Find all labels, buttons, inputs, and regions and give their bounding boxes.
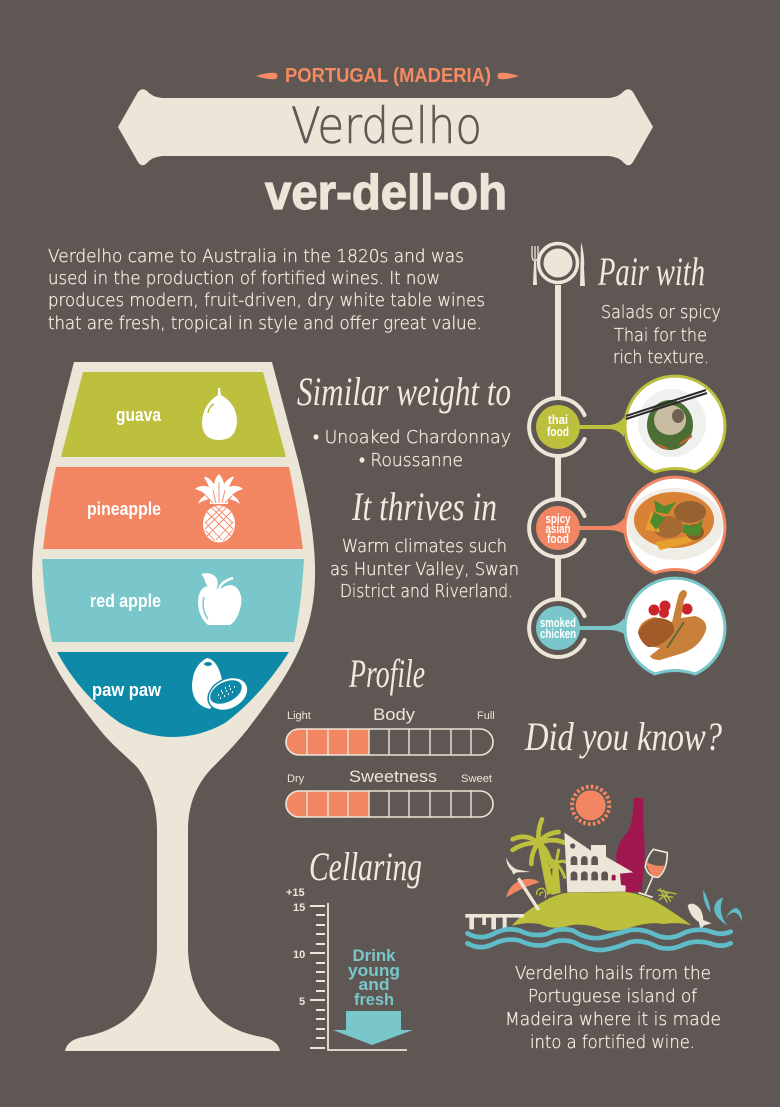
- madeira text: Verdelho hails from the: [515, 963, 711, 984]
- pairing: smoked chicken: smoked: [540, 615, 576, 630]
- pairing timeline: [529, 242, 725, 674]
- pairing: smoked chicken: chicken: [540, 626, 576, 641]
- body scale: Light: [287, 710, 311, 722]
- climate section: District and Riverland.: [340, 581, 513, 602]
- band: guava: guava: [116, 405, 162, 425]
- similar weight section: • Unoaked Chardonnay: [313, 427, 511, 448]
- heading: Profile: Profile: [348, 651, 425, 696]
- callout: drink young and fresh: [348, 946, 400, 1009]
- body scale: Body: [373, 705, 416, 724]
- cellaring scale: 15: [293, 902, 305, 914]
- climate section: Warm climates such: [342, 536, 507, 557]
- band: pineapple: pineapple: [87, 499, 161, 519]
- band: paw paw: [57, 652, 289, 737]
- pairing: spicy asian food: food: [547, 531, 569, 546]
- intro paragraph: used in the production of fortified wines. It now: [48, 268, 440, 289]
- pairing text: Thai for the: [614, 325, 707, 346]
- climate section: [330, 484, 519, 602]
- callout: drink young and fresh: young: [348, 961, 400, 980]
- similar weight section: [297, 369, 511, 471]
- region label: Portugal (Maderia): PORTUGAL (MADERIA): [285, 65, 491, 87]
- icon: waves: [467, 929, 731, 950]
- glass outline: [32, 362, 315, 1051]
- sweetness scale: Sweet: [461, 773, 492, 785]
- madeira text: Madeira where it is made: [505, 1009, 721, 1030]
- pairing: spicy asian food: [529, 477, 725, 573]
- sweetness scale: Sweetness: [349, 767, 437, 786]
- cellaring scale: [286, 887, 407, 1050]
- icon: umbrella: [506, 878, 539, 910]
- pairing text: Salads or spicy: [601, 302, 721, 323]
- heading: It thrives in: It thrives in: [351, 484, 497, 529]
- body scale: Full: [477, 710, 495, 722]
- madeira text: [505, 963, 721, 1053]
- band: red apple: [42, 559, 304, 642]
- icon: palm trees: [513, 819, 570, 895]
- band: pineapple: [43, 467, 303, 549]
- pairing: thai food: thai: [548, 412, 568, 427]
- icon: wine bottle: [616, 798, 645, 893]
- heading: Did you know?: Did you know?: [524, 714, 722, 759]
- intro paragraph: produces modern, fruit-driven, dry white table wines: [48, 290, 485, 311]
- pairing: smoked chicken: [529, 578, 725, 674]
- callout: drink young and fresh: fresh: [354, 990, 394, 1009]
- title banner: Verdelho: [118, 89, 653, 165]
- icon: wine glass: [639, 849, 667, 897]
- cellaring scale: 5: [299, 996, 305, 1008]
- icon: fish: [688, 904, 712, 929]
- icon: pier: [465, 914, 524, 929]
- similar weight section: • Roussanne: [359, 450, 463, 471]
- icon: island: [512, 892, 692, 931]
- arrow: down: [333, 1011, 413, 1045]
- pairing text: [601, 302, 721, 368]
- pairing: thai food: food: [547, 424, 569, 439]
- title banner: Verdelho: Verdelho: [291, 97, 482, 155]
- madeira text: into a fortified wine.: [530, 1032, 695, 1053]
- did you know section: [465, 714, 742, 1053]
- icon: water splash: [703, 890, 742, 925]
- cellaring section: [286, 844, 422, 1050]
- heading: Cellaring: Cellaring: [309, 844, 422, 889]
- pairing: thai food: [529, 376, 725, 472]
- cellaring scale: +15: [286, 887, 305, 899]
- island illustration: [465, 787, 742, 950]
- timeline stem: [555, 285, 561, 599]
- intro paragraph: [48, 246, 485, 334]
- sweetness scale: Dry: [287, 773, 305, 785]
- sweetness scale: [286, 767, 493, 817]
- madeira text: Portuguese island of: [528, 986, 698, 1007]
- wine glass: [32, 362, 315, 1051]
- profile section: [286, 651, 495, 817]
- callout: drink young and fresh: Drink: [352, 946, 396, 965]
- intro paragraph: Verdelho came to Australia in the 1820s and was: [48, 246, 464, 267]
- icon: sun: [572, 787, 609, 824]
- pairing: spicy asian food: asian: [546, 521, 571, 536]
- cellaring scale: 10: [293, 949, 305, 961]
- band: red apple: red apple: [90, 591, 161, 611]
- climate section: as Hunter Valley, Swan: [330, 559, 519, 580]
- intro paragraph: that are fresh, tropical in style and offer great value.: [48, 313, 482, 334]
- icon: small plants: [537, 888, 677, 903]
- callout: drink young and fresh: and: [358, 975, 390, 994]
- pairing text: rich texture.: [613, 347, 709, 368]
- icon: coliseum: [564, 833, 633, 892]
- pronunciation: ver-dell-oh: ver-dell-oh: [265, 166, 507, 220]
- icon: bird: [506, 857, 531, 875]
- band: paw paw: paw paw: [92, 680, 162, 700]
- band: guava: [61, 372, 286, 457]
- pairing: spicy asian food: spicy: [546, 511, 571, 526]
- heading: Similar weight to: Similar weight to: [297, 369, 511, 414]
- heading: Pair with: Pair with: [597, 249, 705, 294]
- body scale: [286, 705, 495, 755]
- icon: plate and cutlery: [532, 242, 585, 286]
